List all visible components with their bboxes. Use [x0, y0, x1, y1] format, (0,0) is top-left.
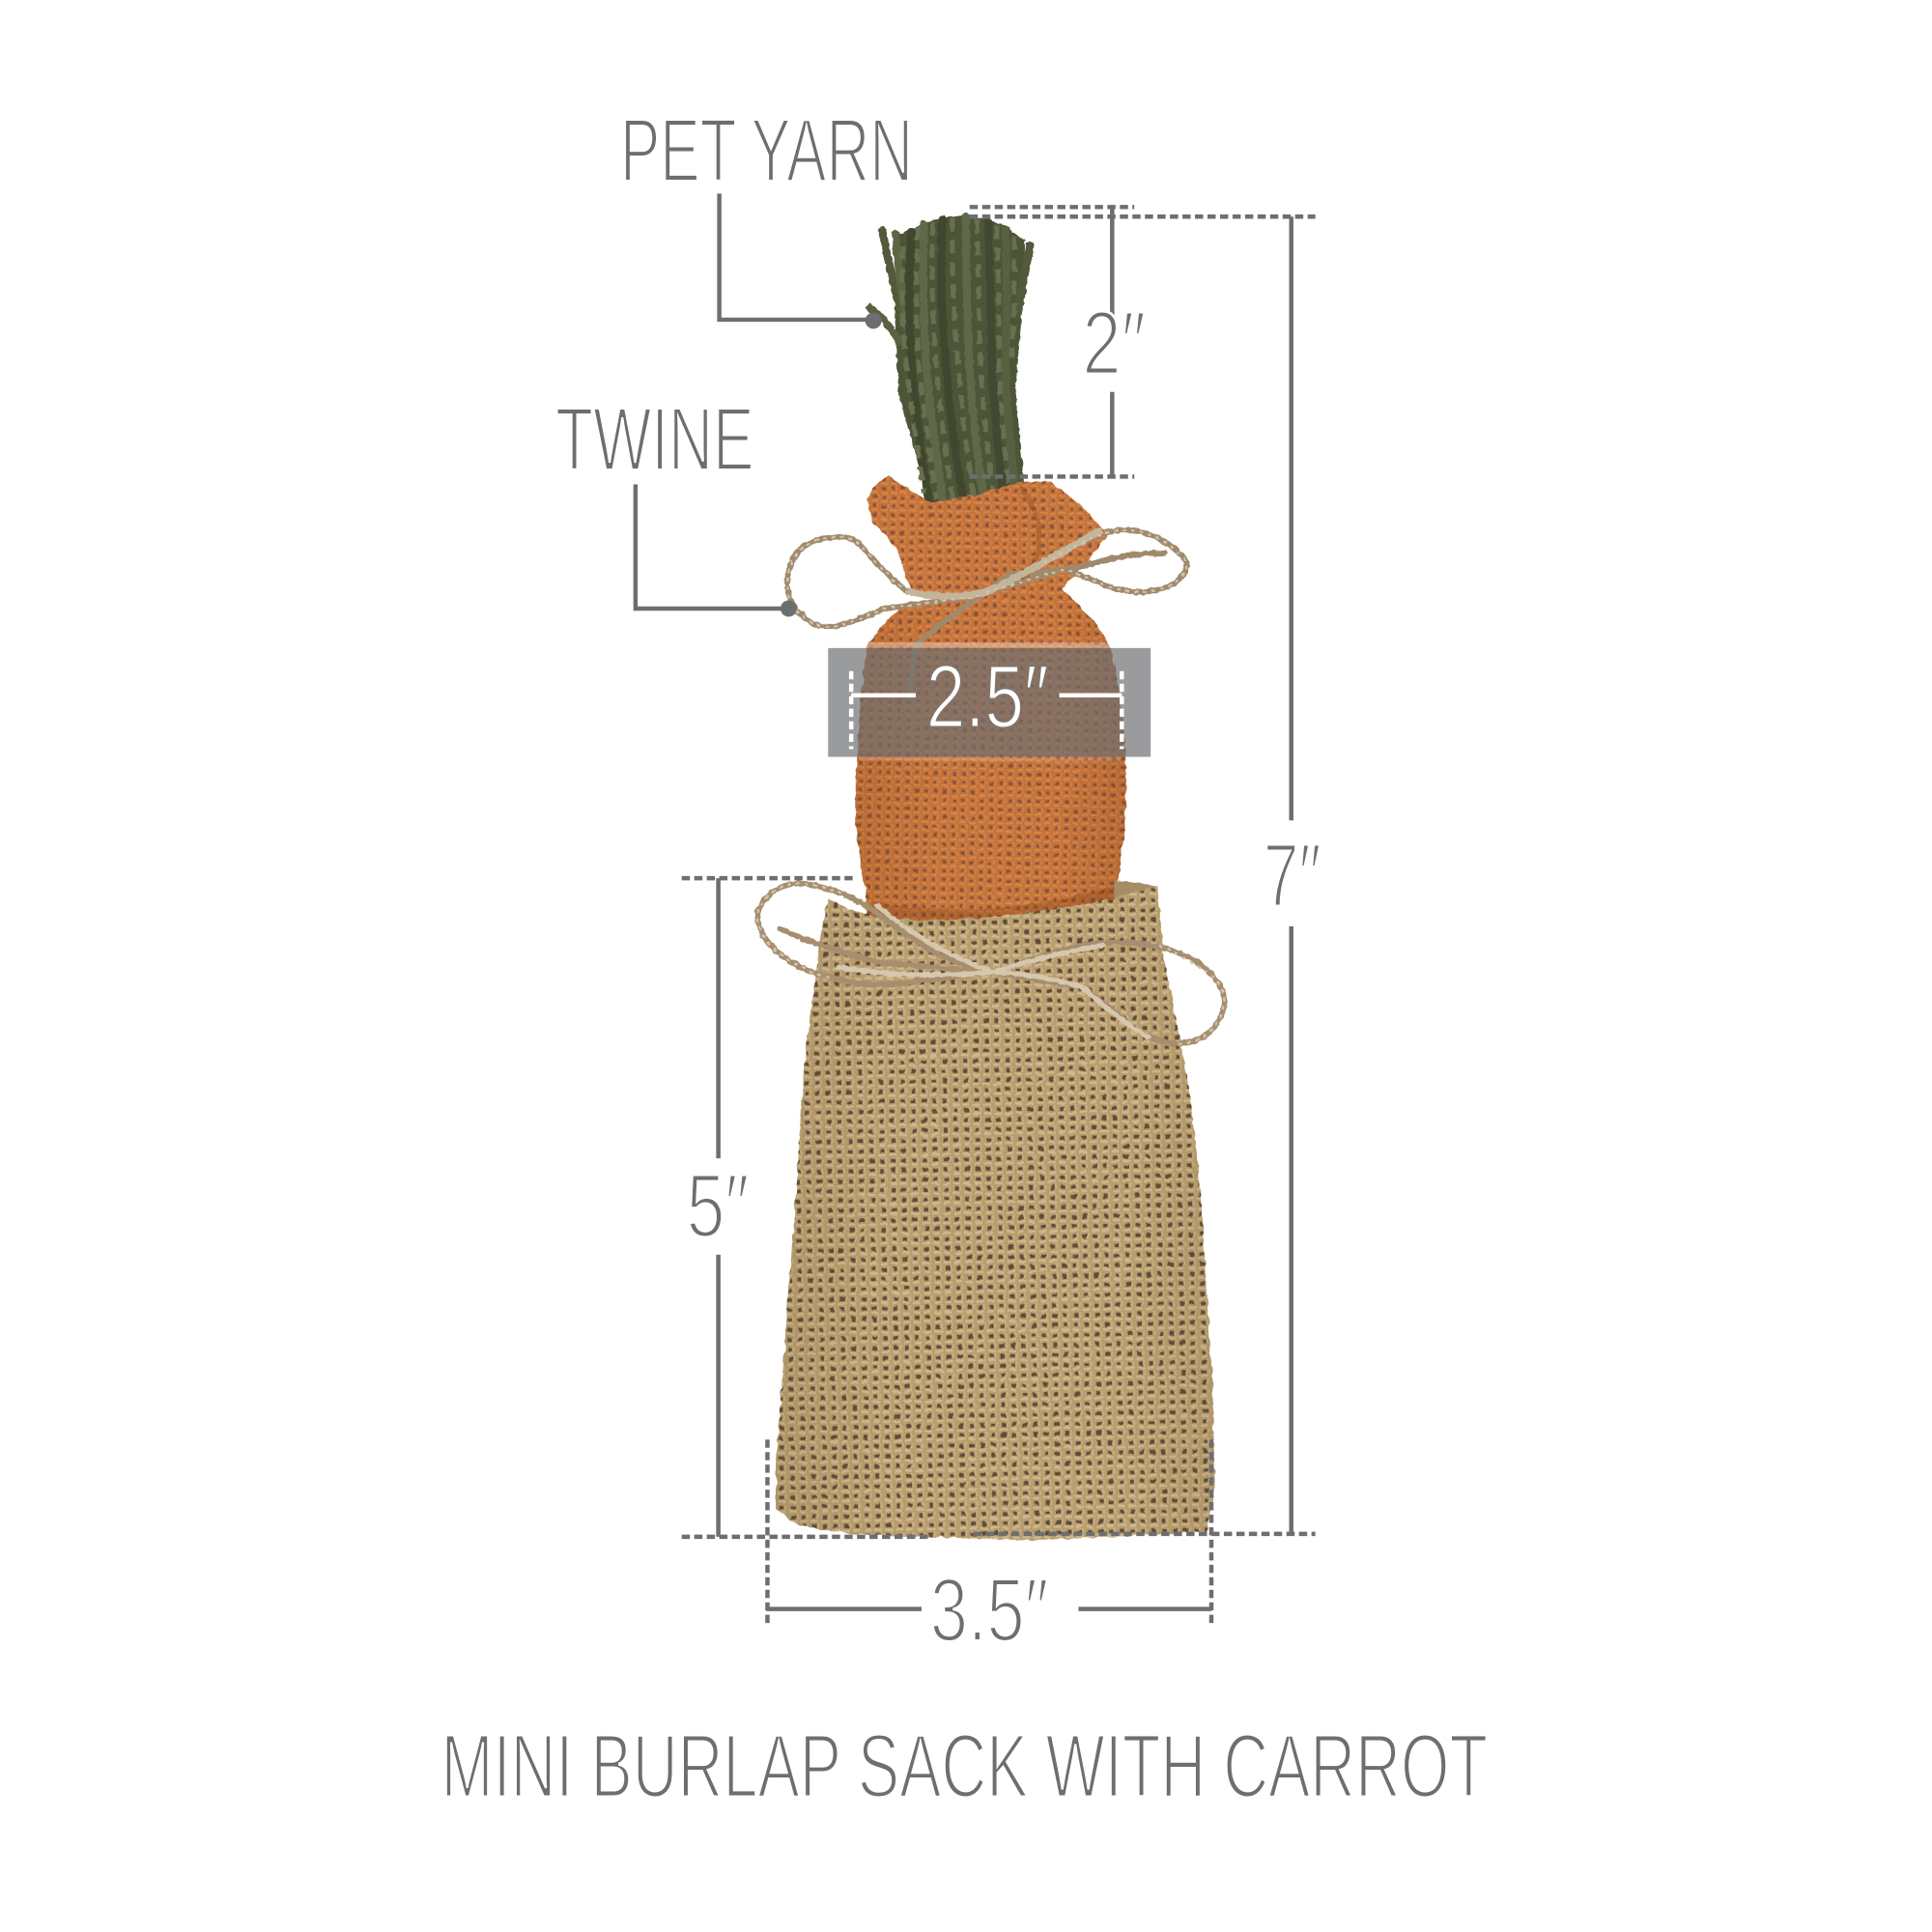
dimension: 3.5 inch sack width [766, 1439, 1211, 1661]
label: PET YARN: PET YARN [620, 99, 913, 200]
carrot twine bow [787, 529, 1186, 697]
dimension: 2 inch top height: 2″ [1082, 293, 1146, 393]
leader line: TWINE [636, 484, 797, 616]
dimension: 5 inch sack height [682, 878, 930, 1537]
burlap sack [777, 880, 1215, 1540]
dimension: 2.5 inch carrot width callout [828, 642, 1151, 760]
title: MINI BURLAP SACK WITH CARROT [441, 1716, 1488, 1816]
dimension: 2 inch top height [970, 207, 1146, 476]
label: TWINE: TWINE [555, 388, 754, 489]
product photo: carrot in burlap sack [757, 214, 1224, 1540]
dimension: 3.5 inch sack width: 3.5″ [930, 1560, 1049, 1661]
carrot green yarn top [867, 214, 1030, 515]
dimension: 2.5 inch carrot width callout: 2.5″ [926, 648, 1049, 747]
dimension: 7 inch total height: 7″ [1264, 825, 1321, 925]
leader line: PET YARN [720, 193, 882, 328]
dimension: 7 inch total height [970, 216, 1321, 1534]
dimension: 5 inch sack height: 5″ [687, 1155, 750, 1256]
carrot body [856, 475, 1126, 955]
sack twine bow [757, 883, 1224, 1043]
